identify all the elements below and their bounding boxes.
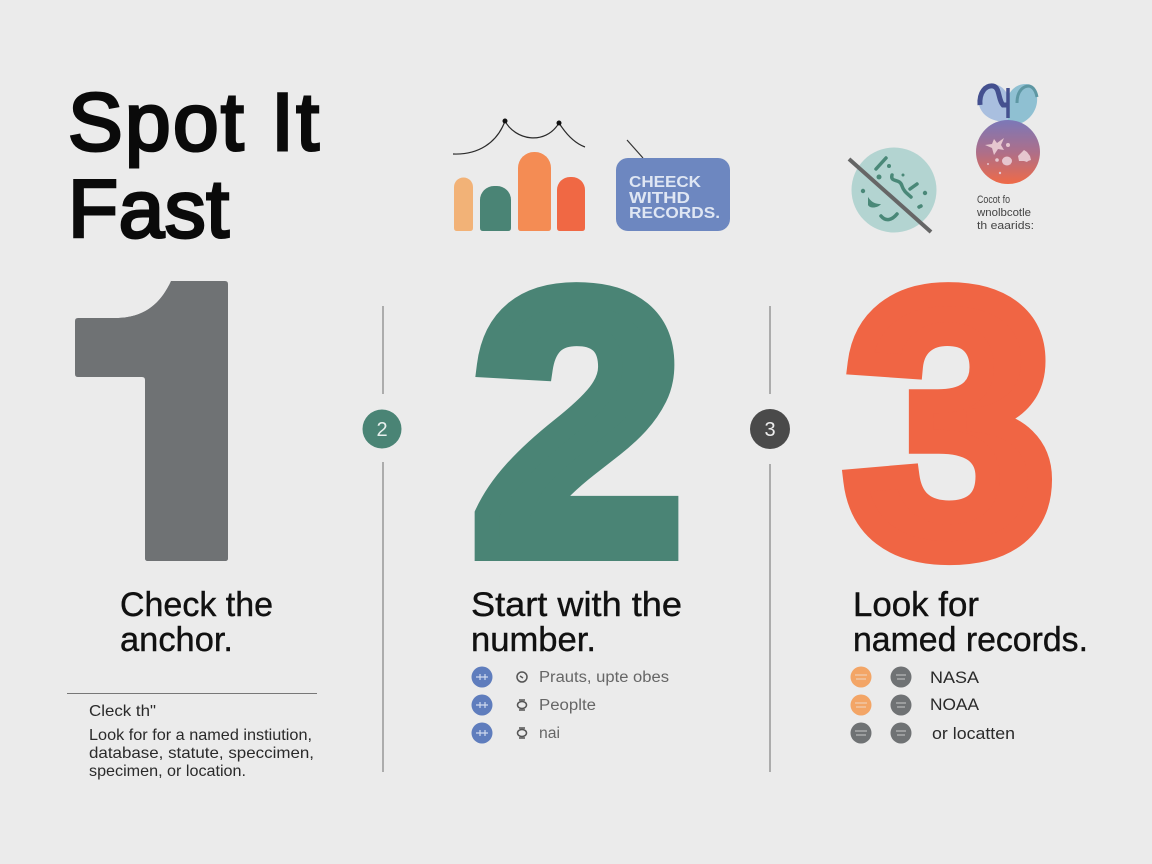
numeral 3: 3 xyxy=(847,219,1053,626)
icon caption xyxy=(976,194,1034,232)
heading: look for named records: named records. xyxy=(853,621,1088,659)
icon: check records card xyxy=(616,140,730,231)
icon caption: wnolbcotle xyxy=(976,207,1031,219)
icon caption: Cocot fo xyxy=(977,194,1010,206)
list: named records: NASA xyxy=(930,669,979,687)
icon: crossed-out microbes circle xyxy=(849,148,936,232)
title xyxy=(68,77,319,255)
icon caption: th eaarids: xyxy=(977,220,1034,232)
icon: check records card: WITHD xyxy=(629,190,690,207)
icon: check records card: CHEECK xyxy=(629,174,702,191)
list: named records xyxy=(850,666,1015,744)
title: Spot It xyxy=(68,77,319,168)
icon: bar chart with curve xyxy=(453,118,585,231)
divider with step badge 3: 3 xyxy=(764,419,776,441)
heading: look for named records xyxy=(853,586,1088,659)
list: named records: or locatten xyxy=(932,725,1015,743)
icon: planet with leaves xyxy=(976,84,1040,184)
list: number examples: Prauts, upte obes xyxy=(539,669,669,686)
list: number examples: nai xyxy=(539,725,560,742)
title: Fast xyxy=(68,164,229,255)
divider with step badge 2 xyxy=(362,306,402,772)
divider with step badge 2: 2 xyxy=(376,419,388,441)
list: number examples: Peoplte xyxy=(539,697,596,714)
numeral 2: 2 xyxy=(474,219,681,627)
icon: check records card: RECORDS. xyxy=(629,205,720,222)
text block: check the anchor note: Cleck th" xyxy=(89,703,156,720)
numeral 1: 1 xyxy=(72,199,294,646)
heading: check the anchor xyxy=(120,586,273,659)
text block: check the anchor note: database, statute, speccimen, xyxy=(89,745,314,762)
heading: start with the number: Start with the xyxy=(471,586,682,624)
heading: start with the number: number. xyxy=(471,621,596,659)
list: number examples xyxy=(472,666,669,744)
divider with step badge 3 xyxy=(750,306,790,772)
heading: look for named records: Look for xyxy=(853,586,979,624)
text block: check the anchor note: Look for for a named instiution, xyxy=(89,727,312,744)
heading: check the anchor: anchor. xyxy=(120,621,233,659)
list: named records: NOAA xyxy=(930,696,979,714)
text block: check the anchor note xyxy=(67,694,317,780)
heading: start with the number xyxy=(471,586,682,659)
heading: check the anchor: Check the xyxy=(120,586,273,624)
text block: check the anchor note: specimen, or location. xyxy=(89,763,246,780)
